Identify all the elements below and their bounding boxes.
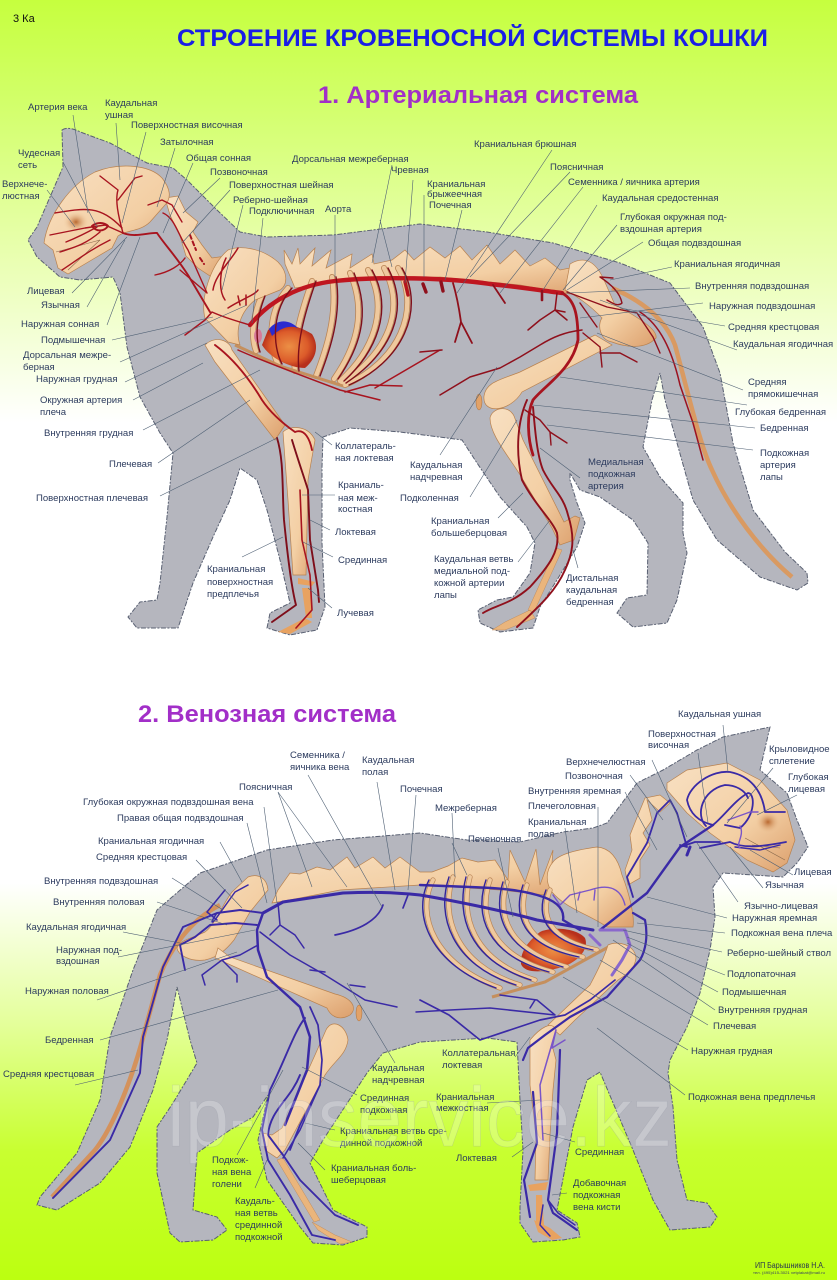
- label: Каудаль-: [235, 1196, 275, 1207]
- label: Почечная: [400, 784, 443, 795]
- cat silhouette 1: [28, 128, 808, 635]
- label: Чревная: [391, 165, 429, 176]
- label: костная: [338, 504, 372, 515]
- label: Печеночная: [468, 834, 521, 845]
- skeleton: tail 2: [52, 905, 220, 1197]
- label: Общая сонная: [186, 153, 251, 164]
- label: артерия: [760, 460, 796, 471]
- label: Наружная грудная: [36, 374, 118, 385]
- label: Поверхностная плечевая: [36, 493, 148, 504]
- label: Бедренная: [45, 1035, 94, 1046]
- leader lines: arterial: [47, 115, 755, 608]
- caudal vena cava: [263, 892, 593, 930]
- label: Подкож-: [212, 1155, 249, 1166]
- label: полая: [528, 829, 554, 840]
- label: Внутренняя грудная: [44, 428, 133, 439]
- label: ная меж-: [338, 493, 378, 504]
- rib veins: [423, 877, 593, 988]
- label: динной подкожной: [340, 1138, 422, 1149]
- label: Дорсальная межреберная: [292, 154, 409, 165]
- watermark: ip-inservice.kz: [167, 1070, 672, 1164]
- label: Подлопаточная: [727, 969, 796, 980]
- label: Наружная под-: [56, 945, 122, 956]
- skeleton: neck 2: [625, 795, 670, 885]
- label: Подкожная вена предплечья: [688, 1092, 815, 1103]
- label: Семенника /: [290, 750, 345, 761]
- label: Позвоночная: [565, 771, 623, 782]
- label: вздошная артерия: [620, 224, 702, 235]
- label: Локтевая: [335, 527, 376, 538]
- label: Внутренняя яремная: [528, 786, 621, 797]
- label: ная ветвь: [235, 1208, 278, 1219]
- label: Коллатеральная: [442, 1048, 515, 1059]
- label: Глубокая: [788, 772, 829, 783]
- label: берная: [23, 362, 55, 373]
- label: Подколенная: [400, 493, 459, 504]
- label: кожной артерии: [434, 578, 504, 589]
- label: лапы: [760, 472, 783, 483]
- label: Язычная: [765, 880, 804, 891]
- label: сеть: [18, 160, 37, 171]
- label: ная локтевая: [335, 453, 394, 464]
- label: поверхностная: [207, 577, 273, 588]
- aorta: [250, 278, 562, 325]
- label: предплечья: [207, 589, 259, 600]
- label: Краниальная ягодичная: [98, 836, 204, 847]
- label: Аорта: [325, 204, 352, 215]
- label: височная: [648, 740, 689, 751]
- skeleton: tibia and hind paw 2: [262, 1024, 352, 1244]
- label: плеча: [40, 407, 67, 418]
- label: Поверхностная: [648, 729, 716, 740]
- skeleton: tail: [612, 288, 792, 577]
- label: Затылочная: [160, 137, 214, 148]
- label: большеберцовая: [431, 528, 507, 539]
- heading: venous system: 2. Венозная система: [138, 701, 397, 728]
- heading: arterial system: 1. Артериальная система: [318, 82, 639, 109]
- skeleton: scapula: [204, 248, 286, 345]
- skeleton: sternum 2: [492, 945, 612, 997]
- skeleton: pelvis 2: [177, 876, 268, 960]
- skeleton: scapula 2: [547, 847, 633, 927]
- label: Общая подвздошная: [648, 238, 741, 249]
- label: Наружная подвздошная: [709, 301, 815, 312]
- label: лицевая: [788, 784, 825, 795]
- label: Срединная: [360, 1093, 409, 1104]
- skeleton: skull 2: [667, 763, 795, 872]
- label: Медиальная: [588, 457, 644, 468]
- leader lines: venous: [75, 725, 797, 1195]
- skeleton: patella 1: [476, 394, 482, 410]
- head and neck arteries: [50, 176, 210, 312]
- panel: venous cat: [37, 727, 808, 1245]
- label: Наружная яремная: [732, 913, 817, 924]
- label: Краниальная ягодичная: [674, 259, 780, 270]
- label: бедренная: [566, 597, 614, 608]
- label: Каудальная ягодичная: [733, 339, 833, 350]
- page code: 3 Ка: [13, 13, 36, 25]
- label: Локтевая: [456, 1153, 497, 1164]
- arteries: [50, 176, 703, 628]
- label: Средняя крестцовая: [3, 1069, 94, 1080]
- skeleton: femur 2: [215, 948, 354, 1018]
- label: ушная: [105, 110, 133, 121]
- skeleton: tibia and hind paw: [490, 409, 580, 630]
- label: Каудальная ветвь: [434, 554, 513, 565]
- pelvic and tail veins: [53, 885, 408, 1240]
- label: Дорсальная межре-: [23, 350, 111, 361]
- iliac and hind leg arteries: [440, 277, 703, 627]
- skeleton: spine 2: [272, 849, 553, 903]
- label: Краниальная ветвь сре-: [340, 1126, 447, 1137]
- label: Верхнечелюстная: [566, 757, 646, 768]
- label: Семенника / яичника артерия: [568, 177, 700, 188]
- label: надчревная: [410, 472, 463, 483]
- skeleton: femur: [484, 335, 612, 409]
- label: Каудальная ягодичная: [26, 922, 126, 933]
- label: Каудальная: [410, 460, 462, 471]
- footer contacts: тел. (495)415-3021 vetplakat@mail.ru: [753, 1270, 825, 1275]
- label: Поясничная: [239, 782, 292, 793]
- label: голени: [212, 1179, 242, 1190]
- label: Плечевая: [109, 459, 152, 470]
- footer credit: ИП Барышников Н.А.: [755, 1261, 825, 1270]
- label: Внутренняя подвздошная: [44, 876, 158, 887]
- label: Краниальная: [431, 516, 489, 527]
- label: Язычно-лицевая: [744, 901, 818, 912]
- label: Поверхностная шейная: [229, 180, 334, 191]
- skeleton: sternum: [235, 345, 343, 386]
- label: люстная: [2, 191, 40, 202]
- label: Реберно-шейная: [233, 195, 308, 206]
- label: артерия: [588, 481, 624, 492]
- skeleton: humerus 2: [548, 943, 636, 1035]
- shoulder and front leg veins: [416, 887, 646, 1236]
- label: лапы: [434, 590, 457, 601]
- label: Плечевая: [713, 1021, 756, 1032]
- skeleton: skull: [44, 166, 169, 274]
- skeleton: ribs 2: [427, 877, 597, 988]
- label: Каудальная средостенная: [602, 193, 718, 204]
- label: Правая общая подвздошная: [117, 813, 244, 824]
- label: Верхнече-: [2, 179, 47, 190]
- panel: arterial cat: [28, 128, 808, 635]
- skeleton: humerus: [205, 340, 285, 440]
- neck and head veins: [600, 772, 786, 930]
- shoulder and front leg arteries: [185, 248, 440, 628]
- label: Почечная: [429, 200, 472, 211]
- label: Окружная артерия: [40, 395, 122, 406]
- title: СТРОЕНИЕ КРОВЕНОСНОЙ СИСТЕМЫ КОШКИ: [177, 24, 768, 52]
- label: локтевая: [442, 1060, 482, 1071]
- label: надчревная: [372, 1075, 425, 1086]
- label: яичника вена: [290, 762, 350, 773]
- label: Краниальная: [427, 179, 485, 190]
- label: Чудесная: [18, 148, 60, 159]
- label: Подмышечная: [722, 987, 786, 998]
- skeleton: patella 2: [356, 1005, 362, 1021]
- label: Глубокая окружная подвздошная вена: [83, 797, 254, 808]
- heart 1: [254, 321, 316, 368]
- label: Лицевая: [27, 286, 65, 297]
- label: Позвоночная: [210, 167, 268, 178]
- label: Срединная: [575, 1147, 624, 1158]
- heart 2: [521, 929, 586, 971]
- label: Краниальная: [528, 817, 586, 828]
- skeleton: front forearm and paw: [278, 427, 315, 634]
- label: Поясничная: [550, 162, 603, 173]
- label: полая: [362, 767, 388, 778]
- label: медиальной под-: [434, 566, 510, 577]
- label: Внутренняя подвздошная: [695, 281, 809, 292]
- label: Поверхностная височная: [131, 120, 243, 131]
- label: подкожная: [360, 1105, 407, 1116]
- rib arteries: [257, 268, 411, 385]
- labels: arterial: [2, 98, 833, 619]
- label: Каудальная: [105, 98, 157, 109]
- label: Подкожная вена плеча: [731, 928, 833, 939]
- skeleton: front forearm and paw 2: [528, 1025, 562, 1240]
- label: вздошная: [56, 956, 99, 967]
- label: Артерия века: [28, 102, 88, 113]
- label: Наружная грудная: [691, 1046, 773, 1057]
- veins: [53, 772, 786, 1240]
- label: Каудальная: [362, 755, 414, 766]
- label: Крыловидное: [769, 744, 830, 755]
- label: Бедренная: [760, 423, 809, 434]
- label: Язычная: [41, 300, 80, 311]
- label: Средняя: [748, 377, 786, 388]
- label: Глубокая окружная под-: [620, 212, 727, 223]
- label: Лучевая: [337, 608, 374, 619]
- label: Наружная сонная: [21, 319, 99, 330]
- label: Лицевая: [794, 867, 832, 878]
- label: Краниальная: [207, 564, 265, 575]
- label: Реберно-шейный ствол: [727, 948, 831, 959]
- label: Наружная половая: [25, 986, 109, 997]
- label: шеберцовая: [331, 1175, 386, 1186]
- label: Каудальная ушная: [678, 709, 761, 720]
- label: прямокишечная: [748, 389, 818, 400]
- skeleton: neck vertebrae: [165, 196, 226, 276]
- label: подкожная: [573, 1190, 620, 1201]
- abdominal branches: [405, 282, 542, 352]
- label: Коллатераль-: [335, 441, 396, 452]
- skeleton: ribs: [253, 268, 407, 385]
- label: Подкожная: [760, 448, 809, 459]
- label: Подключичная: [249, 206, 314, 217]
- skeleton: pelvis: [565, 260, 656, 346]
- label: Внутренняя грудная: [718, 1005, 807, 1016]
- label: сплетение: [769, 756, 815, 767]
- label: вена кисти: [573, 1202, 620, 1213]
- label: Срединная: [338, 555, 387, 566]
- labels: venous: [3, 709, 833, 1243]
- label: межкостная: [436, 1103, 489, 1114]
- label: Подмышечная: [41, 335, 105, 346]
- label: Внутренняя половая: [53, 897, 145, 908]
- label: срединной: [235, 1220, 282, 1231]
- label: ная вена: [212, 1167, 252, 1178]
- label: Краниаль-: [338, 480, 384, 491]
- label: Плечеголовная: [528, 801, 596, 812]
- skeleton: spine and spikes: [284, 245, 603, 294]
- label: Средняя крестцовая: [728, 322, 819, 333]
- label: Межреберная: [435, 803, 497, 814]
- label: Каудальная: [372, 1063, 424, 1074]
- label: подкожной: [235, 1232, 283, 1243]
- label: Краниальная: [436, 1092, 494, 1103]
- label: Краниальная брюшная: [474, 139, 576, 150]
- label: Дистальная: [566, 573, 618, 584]
- label: Глубокая бедренная: [735, 407, 826, 418]
- label: Добавочная: [573, 1178, 626, 1189]
- label: каудальная: [566, 585, 617, 596]
- label: Средняя крестцовая: [96, 852, 187, 863]
- label: Краниальная боль-: [331, 1163, 416, 1174]
- label: брыжеечная: [427, 189, 482, 200]
- label: подкожная: [588, 469, 635, 480]
- azygos vein: [420, 885, 580, 930]
- cat silhouette 2: [37, 727, 808, 1245]
